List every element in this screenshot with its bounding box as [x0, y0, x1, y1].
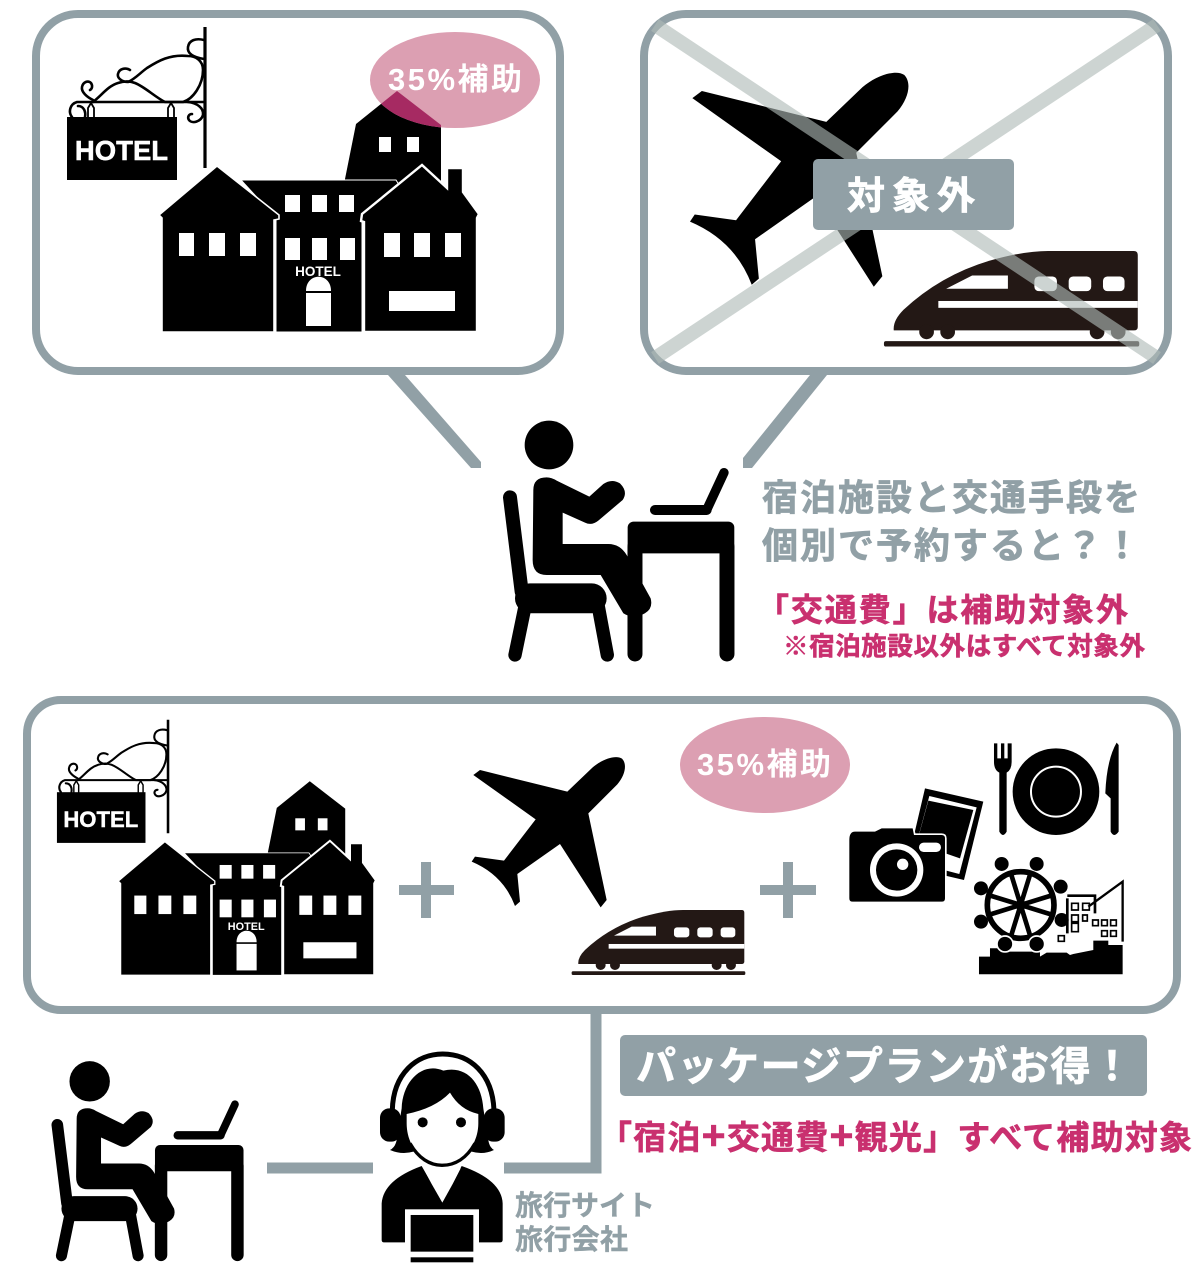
text: all subsidised: 「宿泊+交通費+観光」すべて補助対象	[599, 1111, 1192, 1159]
icon: small bullet train	[572, 910, 745, 975]
icon: hotel sign: HOTEL	[75, 135, 168, 166]
label: travel site, travel agency: 旅行会社	[515, 1218, 628, 1258]
text block: separate booking: ※宿泊施設以外はすべて対象外	[783, 626, 1145, 663]
icon: hotel sign	[67, 27, 205, 180]
callout: 35% subsidy	[680, 717, 850, 813]
icon: small person at laptop	[57, 1061, 244, 1256]
callout: 35% subsidy	[370, 32, 540, 128]
banner: package plan is a good deal: パッケージプランがお得！	[636, 1034, 1132, 1092]
icon: operator with headset	[380, 1054, 505, 1262]
icon: hotel building: HOTEL	[295, 264, 341, 279]
panel: package plan	[27, 700, 1177, 1010]
icon: small hotel sign	[57, 720, 168, 843]
icon: small hotel building: HOTEL	[228, 921, 265, 933]
line: panel to operator	[504, 1014, 596, 1168]
label: not covered	[813, 159, 1014, 230]
icon: bullet train	[884, 251, 1139, 347]
icon: ferris wheel and city	[974, 857, 1123, 974]
arrow: right connector	[743, 375, 827, 468]
text block: separate booking: 個別で予約すると？！	[762, 517, 1140, 569]
icon: airplane	[690, 73, 908, 287]
text block: separate booking: 宿泊施設と交通手段を	[762, 469, 1140, 521]
panel: hotel	[36, 14, 560, 371]
callout: 35% subsidy: 35%補助	[388, 62, 522, 97]
arrow: left connector	[388, 375, 481, 468]
plus sign	[760, 862, 816, 918]
panel: transport excluded	[644, 14, 1168, 371]
label: not covered: 対象外	[847, 165, 975, 220]
cross mark	[655, 25, 1157, 358]
text block: separate booking: 「交通費」は補助対象外	[757, 585, 1128, 631]
label: travel site, travel agency	[515, 1184, 655, 1258]
icon: plate and cutlery	[994, 743, 1119, 835]
icon: small airplane	[472, 757, 625, 907]
icon: camera and photo	[849, 788, 983, 902]
icon: small hotel sign: HOTEL	[63, 807, 138, 832]
icon: hotel building	[159, 91, 479, 332]
line: person to operator	[267, 1162, 373, 1174]
icon: person at laptop	[510, 421, 734, 655]
icon: small hotel building	[118, 781, 376, 975]
callout: 35% subsidy: 35%補助	[697, 747, 831, 782]
label: travel site, travel agency: 旅行サイト	[515, 1184, 655, 1224]
text block: separate booking	[757, 469, 1145, 663]
plus sign	[399, 862, 454, 918]
